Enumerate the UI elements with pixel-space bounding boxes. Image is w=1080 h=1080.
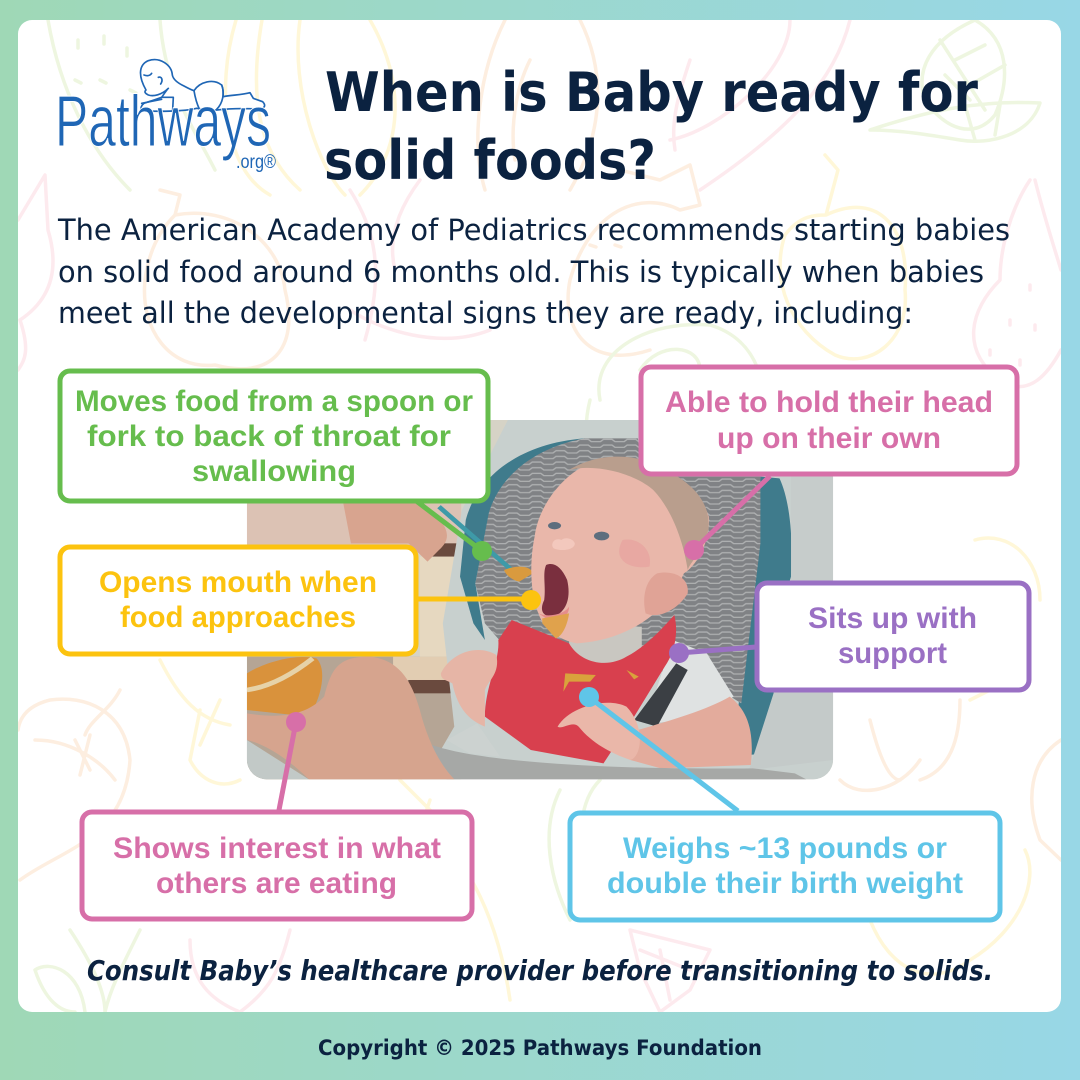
callout: shows interest: others are eating — [156, 867, 397, 900]
neck — [569, 627, 642, 667]
callout: shows interest: Shows interest in what — [113, 832, 441, 865]
intro paragraph — [57, 213, 1010, 330]
title — [324, 61, 978, 192]
logo: Pathways.org — [55, 60, 276, 173]
open mouth — [542, 564, 569, 616]
callout: opens mouth: Opens mouth when — [99, 566, 377, 599]
shirt — [656, 641, 734, 722]
connector: shows interest — [279, 712, 306, 810]
feeding hand front — [247, 657, 454, 779]
callout: opens mouth: food approaches — [120, 601, 356, 634]
feeding hand and spoon — [343, 503, 447, 562]
intro paragraph: on solid food around 6 months old. This is typically when babies — [58, 255, 984, 289]
callout: moves food: Moves food from a spoon or — [75, 385, 473, 418]
copyright footer: Copyright © 2025 Pathways Foundation — [318, 1036, 762, 1060]
.org: .org® — [236, 152, 276, 173]
callout: moves food: fork to back of throat for — [87, 420, 451, 453]
connector: sits up — [669, 643, 756, 663]
mesh padding — [475, 438, 760, 703]
callout: moves food: swallowing — [192, 455, 356, 488]
intro paragraph: The American Academy of Pediatrics recommends starting babies — [57, 213, 1010, 247]
baby outline — [141, 60, 265, 111]
callout: moves food — [60, 371, 488, 501]
baby feeding photo — [247, 420, 833, 779]
callout: opens mouth — [60, 547, 416, 654]
near arm — [630, 697, 752, 768]
title: solid foods? — [324, 129, 656, 192]
callout: weighs: Weighs ~13 pounds or — [623, 832, 947, 865]
connector: moves food — [415, 500, 492, 561]
connector: opens mouth — [416, 590, 541, 610]
title: When is Baby ready for — [325, 61, 978, 124]
wordmark: Pathways — [55, 82, 271, 162]
background room — [247, 503, 461, 547]
eyes — [548, 522, 561, 529]
callout: weighs: double their birth weight — [607, 867, 963, 900]
tray — [427, 743, 806, 779]
callout: shows interest — [82, 812, 472, 919]
seat teal trim — [460, 438, 592, 640]
seat shell — [424, 420, 833, 779]
callout: sits up — [757, 583, 1029, 690]
baby head — [531, 458, 709, 643]
intro paragraph: meet all the developmental signs they are ready, including: — [58, 296, 913, 330]
callout: weighs — [570, 813, 1000, 920]
callout: sits up: support — [838, 637, 947, 670]
callout: hold head — [641, 367, 1017, 474]
connector: weighs — [579, 687, 738, 811]
callout: hold head: Able to hold their head — [665, 386, 993, 419]
bib — [485, 615, 676, 763]
far hand — [441, 650, 497, 727]
callout: sits up: Sits up with — [808, 602, 977, 635]
food container — [247, 657, 322, 717]
connector: hold head — [684, 476, 770, 560]
callout: hold head: up on their own — [717, 422, 941, 455]
